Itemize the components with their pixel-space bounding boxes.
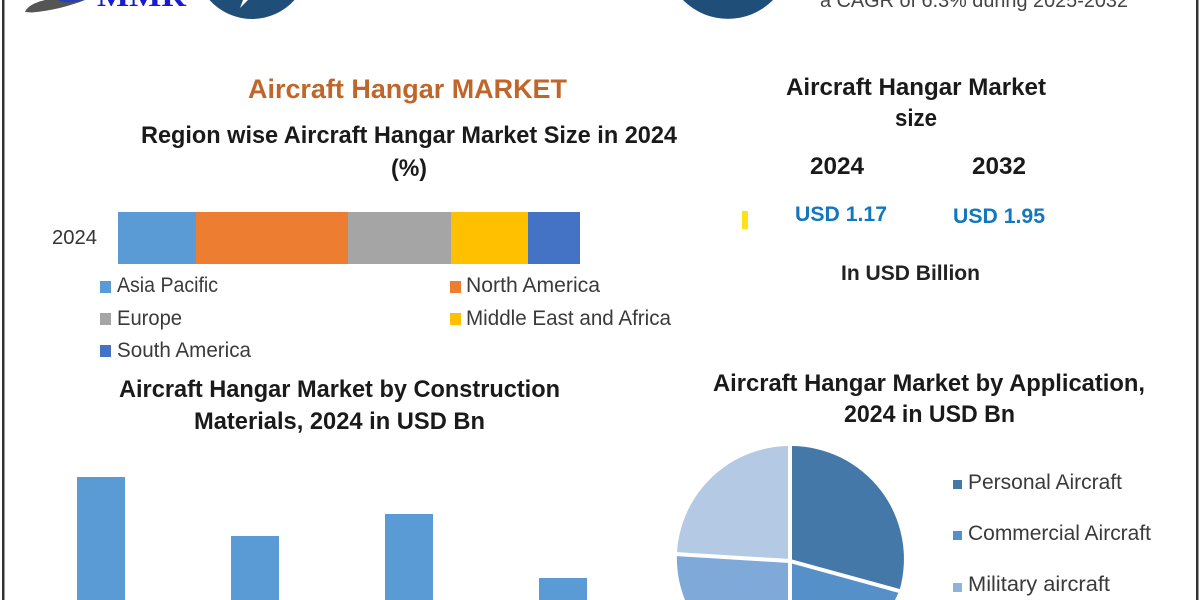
- heading: application: [713, 370, 1145, 428]
- legend: regions: South America: [117, 339, 251, 362]
- heading: application: Aircraft Hangar Market by Application,: [713, 370, 1145, 397]
- legend: applications: Personal Aircraft: [968, 471, 1122, 494]
- legend: regions: Europe: [117, 307, 182, 330]
- market size years: [810, 153, 1026, 180]
- heading: region chart: Region wise Aircraft Hangar Market Size in 2024: [141, 122, 678, 149]
- stacked bar chart: region share: 2024: [52, 227, 97, 249]
- legend: regions: Asia Pacific: [117, 274, 218, 297]
- logo: MMR: [25, 0, 186, 13]
- heading: application: 2024 in USD Bn: [844, 401, 1015, 428]
- icon: right header circle: [683, 0, 773, 19]
- heading: market size: size: [895, 105, 937, 132]
- legend: applications: Military aircraft: [968, 573, 1110, 596]
- heading: construction materials: Aircraft Hangar Market by Construction: [119, 376, 560, 403]
- market size values: USD 1.95: [953, 205, 1045, 228]
- heading: construction materials: Materials, 2024 in USD Bn: [194, 408, 485, 435]
- title: Aircraft Hangar MARKET: [248, 74, 568, 104]
- unit label: In USD Billion: [841, 262, 980, 285]
- market size values: [795, 203, 1045, 228]
- market size years: 2032: [972, 153, 1026, 180]
- heading: market size: [786, 74, 1046, 132]
- legend: regions: Middle East and Africa: [466, 307, 671, 330]
- pie chart: application: [675, 444, 904, 600]
- yellow marker: [742, 211, 748, 229]
- market size years: 2024: [810, 153, 865, 180]
- legend: applications: Commercial Aircraft: [968, 522, 1151, 545]
- legend: applications: [953, 471, 1151, 596]
- icon: left header circle: [210, 0, 294, 19]
- heading: region chart: (%): [391, 155, 427, 182]
- heading: market size: Aircraft Hangar Market: [786, 74, 1046, 101]
- heading: region chart: [141, 122, 678, 182]
- heading: construction materials: [119, 376, 560, 435]
- legend: regions: North America: [466, 274, 600, 297]
- legend: regions: [100, 274, 671, 362]
- market size values: USD 1.17: [795, 203, 887, 226]
- bar chart: construction materials: [77, 477, 587, 600]
- stacked bar chart: region share: [52, 212, 580, 264]
